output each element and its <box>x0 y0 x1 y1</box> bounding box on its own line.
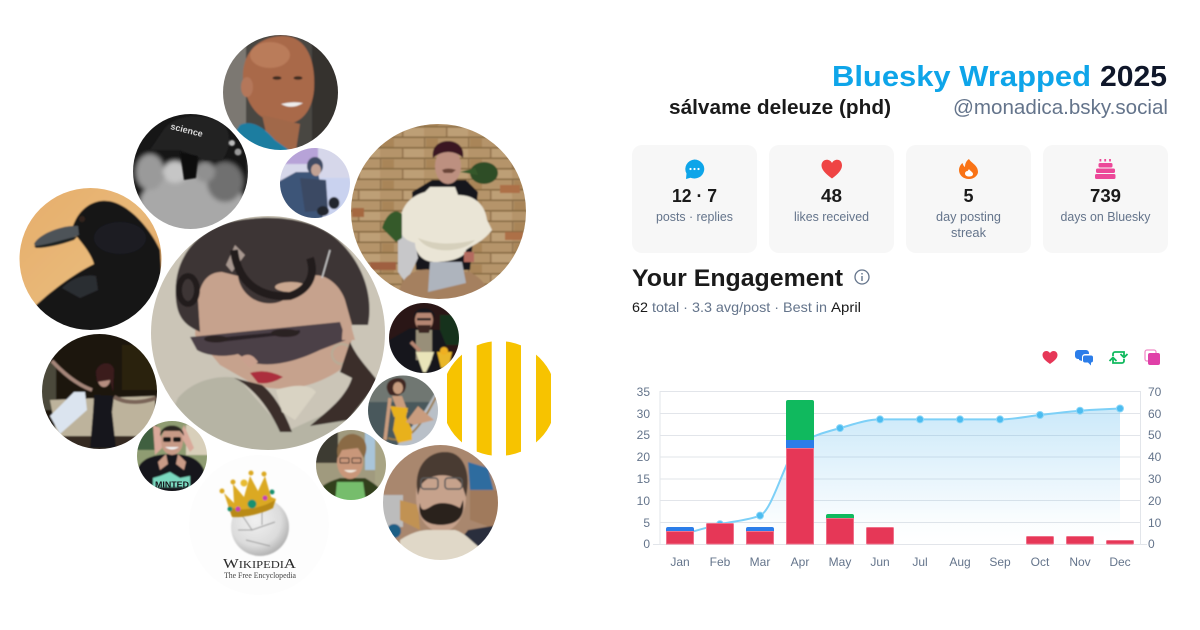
left axis labels: 15 <box>637 472 650 486</box>
month labels: Aug <box>949 555 971 569</box>
stat card: posts and replies: posts · replies <box>656 210 733 224</box>
avatar: dancing woman <box>40 332 160 452</box>
stat card: days on Bluesky <box>1043 145 1168 253</box>
month labels: May <box>829 555 851 569</box>
avatar: man with sunglasses and child <box>137 421 207 491</box>
avatar: man with marble bust <box>351 124 526 299</box>
avatar: bearded man with glasses <box>381 443 501 565</box>
left axis labels: 35 <box>637 385 650 399</box>
avatar: science cap man <box>133 114 248 229</box>
stat card: day posting streak: 5 <box>963 186 974 206</box>
month labels: Dec <box>1109 555 1131 569</box>
stat card: likes received: likes received <box>794 210 869 224</box>
month labels: Sep <box>989 555 1011 569</box>
stat card: day posting streak <box>906 145 1031 253</box>
engagement summary: 62 <box>632 299 648 315</box>
Wikipedia tagline: The Free Encyclopedia <box>224 571 296 580</box>
cumulative line <box>680 408 1120 535</box>
icon: heart <box>822 160 842 178</box>
month labels: Oct <box>1031 555 1050 569</box>
icon: replies bubbles <box>1075 350 1093 366</box>
stat card: days on Bluesky: 739 <box>1090 186 1121 206</box>
legend icons <box>1042 350 1160 366</box>
bars: replies and reposts <box>666 400 854 531</box>
stat card: days on Bluesky: days on Bluesky <box>1060 210 1151 224</box>
right axis labels: 20 <box>1148 494 1162 508</box>
avatar: woman with sunglasses <box>148 214 388 460</box>
icon: chat bubble <box>685 160 704 179</box>
right axis labels: 30 <box>1148 472 1162 486</box>
handle: @monadica.bsky.social <box>953 97 1168 119</box>
avatar: yellow striped circle <box>447 338 551 460</box>
right axis labels: 50 <box>1148 428 1162 442</box>
icon: info <box>855 270 869 284</box>
month labels <box>670 555 1131 569</box>
icon: reposts arrows <box>1110 352 1128 363</box>
left axis labels <box>637 385 650 551</box>
right axis labels: 40 <box>1148 450 1162 464</box>
left axis labels: 25 <box>637 428 650 442</box>
right axis labels <box>1148 385 1162 551</box>
stat card: likes received: 48 <box>821 186 842 206</box>
avatar: pin-up in yellow swimsuit <box>368 376 438 446</box>
Wikipedia wordmark: WIKIPEDI A <box>223 557 297 572</box>
Wikipedia globe <box>231 498 289 556</box>
line points <box>716 405 1124 528</box>
grid lines <box>653 391 1147 544</box>
engagement summary: total · 3.3 avg/post · Best in <box>652 299 827 315</box>
left axis labels: 30 <box>637 407 650 421</box>
title: 2025 <box>1100 61 1167 93</box>
icon: flame <box>959 159 978 179</box>
avatar: crow <box>18 186 165 332</box>
stat card: posts and replies: 12 · 7 <box>672 186 717 206</box>
title: Bluesky Wrapped <box>832 61 1091 93</box>
avatar: ginger man in green shirt <box>316 430 386 500</box>
avatar: bald man <box>223 35 338 150</box>
month labels: Apr <box>791 555 809 569</box>
avatar: man with cocktails <box>389 303 459 373</box>
avatar: crowned Wikipedia globe <box>189 455 329 595</box>
avatar: hiker <box>280 148 350 218</box>
right axis labels: 60 <box>1148 407 1162 421</box>
crown <box>220 470 276 517</box>
right axis labels: 10 <box>1148 516 1162 530</box>
avatar cluster <box>18 30 551 595</box>
right axis labels: 70 <box>1148 385 1162 399</box>
right axis labels: 0 <box>1148 537 1155 551</box>
icon: likes heart <box>1042 351 1058 364</box>
bars: likes <box>666 448 1134 544</box>
month labels: Jun <box>870 555 890 569</box>
combined chart <box>637 385 1162 569</box>
icon: quotes squares <box>1145 350 1160 365</box>
month labels: Jan <box>670 555 690 569</box>
left axis labels: 10 <box>637 494 650 508</box>
left axis labels: 0 <box>643 537 650 551</box>
cumulative area <box>680 408 1120 544</box>
icon: birthday cake <box>1095 159 1116 179</box>
avatar: man with sunglasses and child: MINTED <box>155 480 189 490</box>
left axis labels: 20 <box>637 450 650 464</box>
month labels: Nov <box>1069 555 1091 569</box>
stat card: day posting streak: day posting <box>936 210 1001 224</box>
stat card: posts and replies <box>632 145 757 253</box>
month labels: Feb <box>710 555 731 569</box>
engagement summary: April <box>831 299 861 315</box>
display name: sálvame deleuze (phd) <box>669 97 891 119</box>
heading: your engagement: Your Engagement <box>632 265 843 292</box>
stat card: likes received <box>769 145 894 253</box>
stat card: day posting streak: streak <box>951 226 987 240</box>
month labels: Mar <box>750 555 770 569</box>
left axis labels: 5 <box>643 516 650 530</box>
month labels: Jul <box>912 555 928 569</box>
avatar: science cap man: science <box>170 121 204 139</box>
